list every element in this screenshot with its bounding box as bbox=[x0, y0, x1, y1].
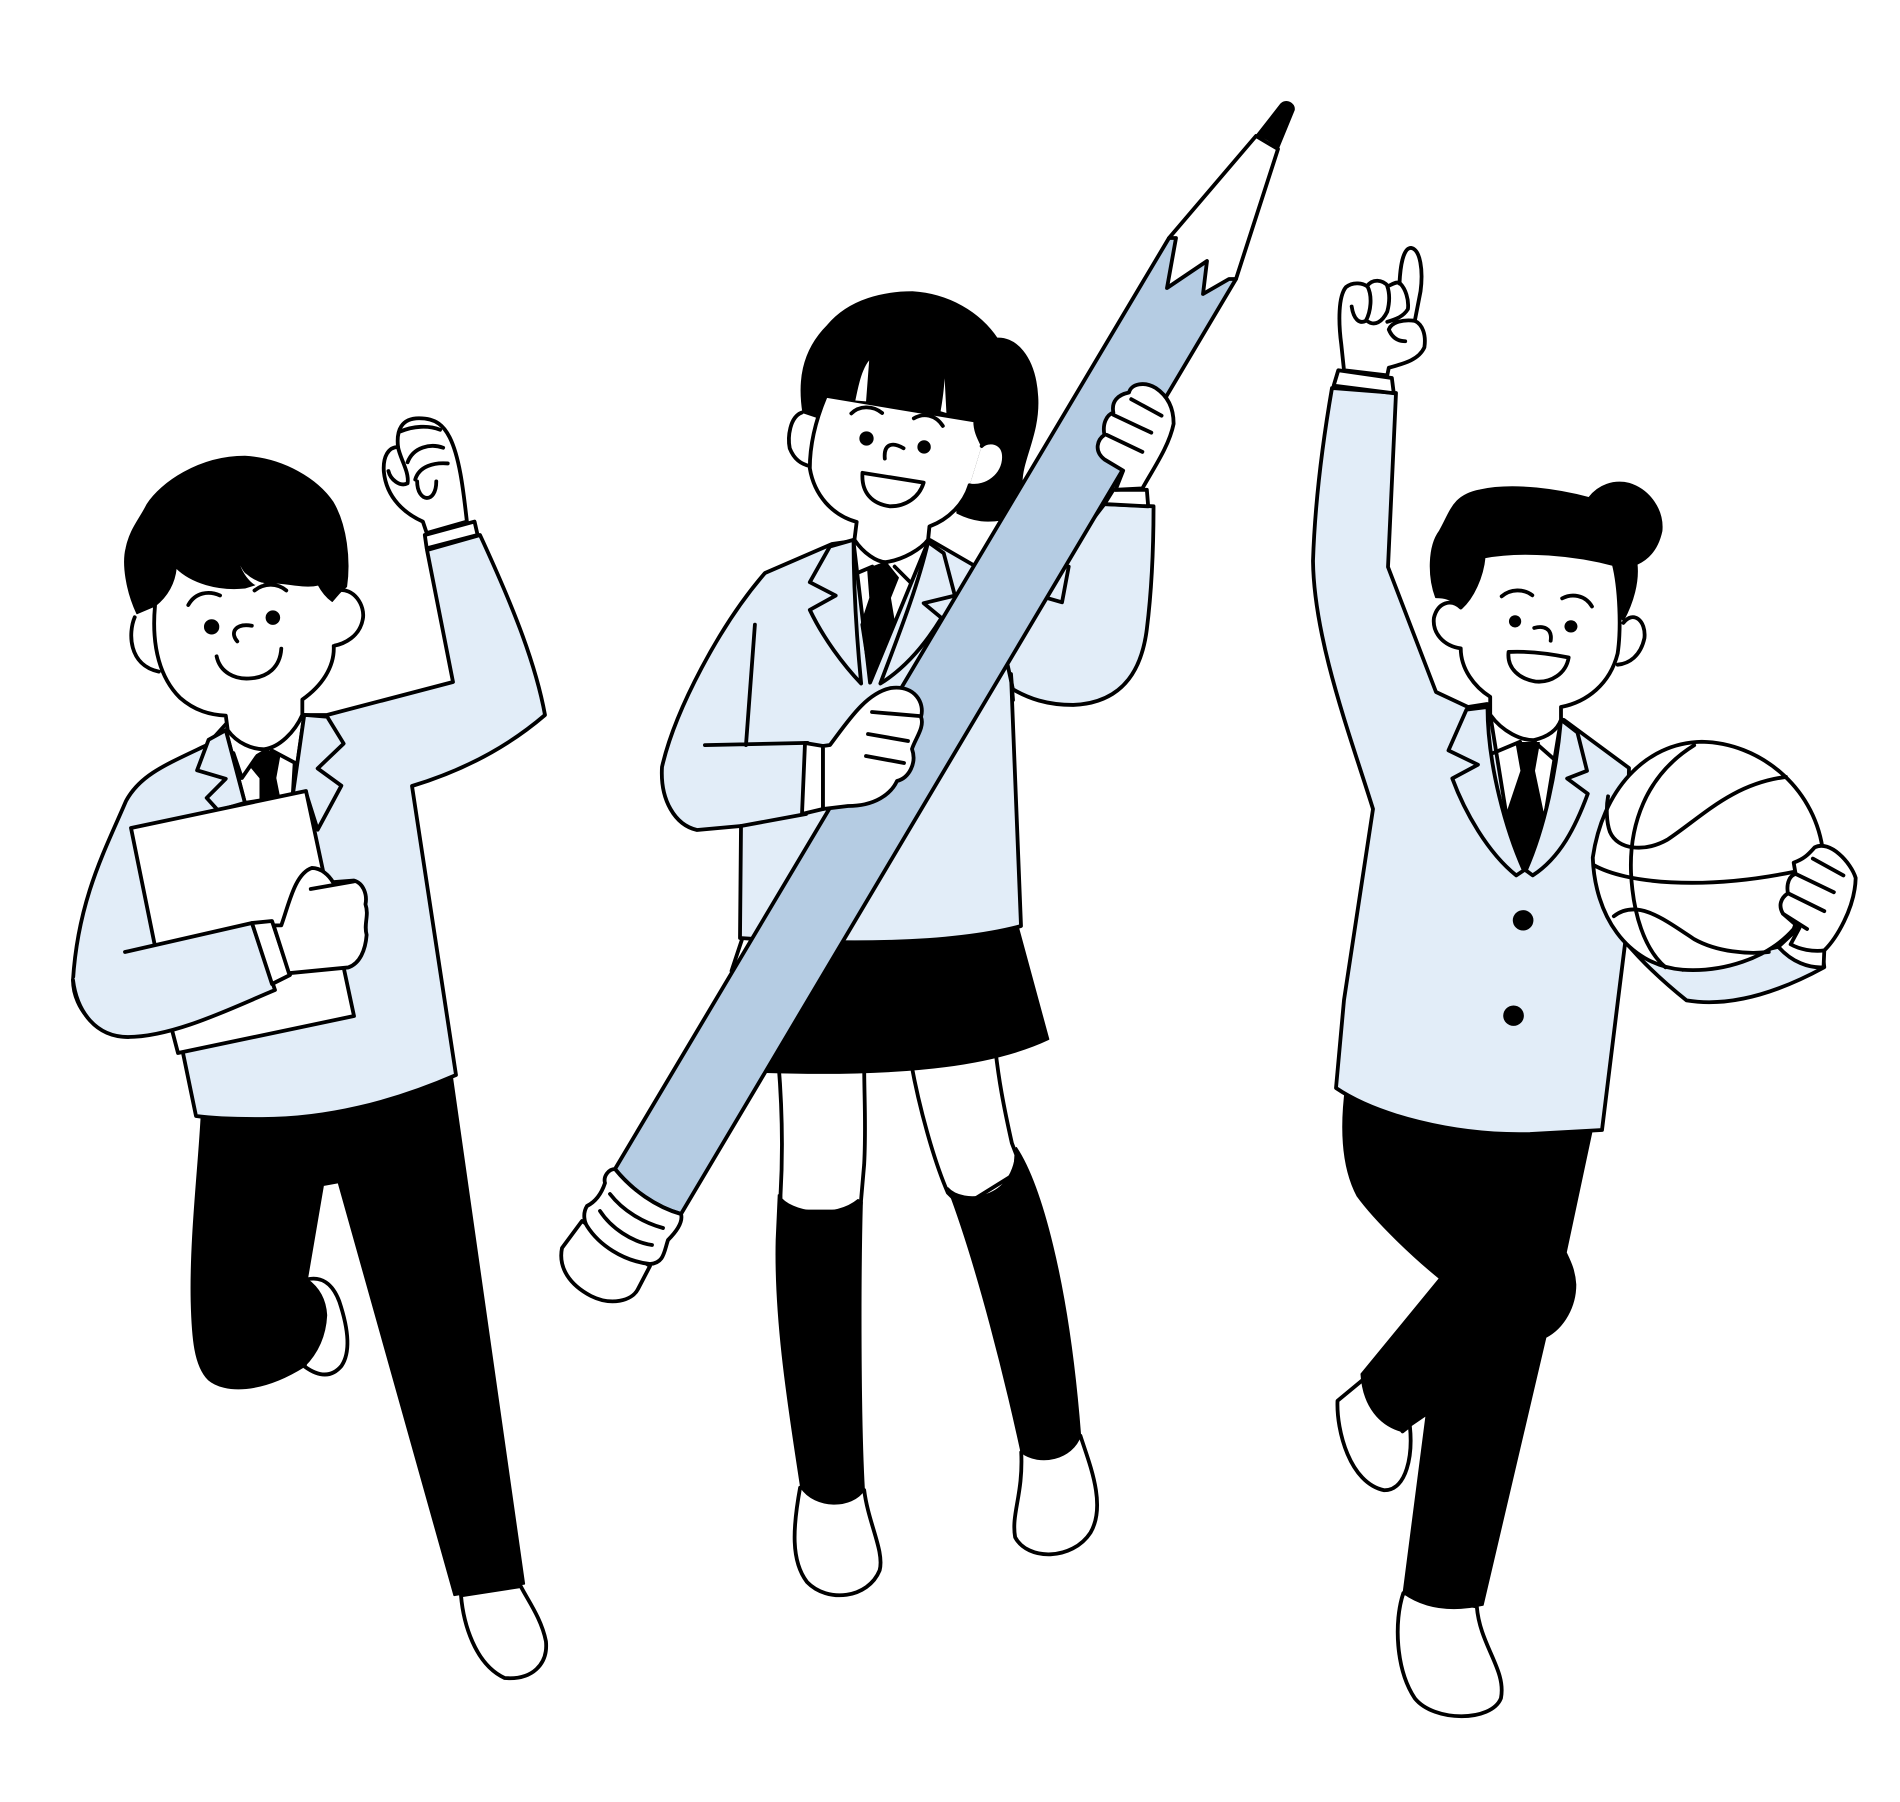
collar lines bbox=[1493, 742, 1556, 761]
eyebrows bbox=[851, 407, 943, 426]
upper fingers bbox=[1107, 399, 1162, 452]
hair fringe bbox=[801, 292, 1011, 446]
girl jacket bbox=[662, 540, 1021, 942]
girl lower body bbox=[732, 924, 1097, 1595]
left boy trousers and shoes bbox=[191, 1074, 546, 1678]
girl lower cuff bbox=[802, 743, 823, 814]
eyes bbox=[204, 610, 280, 634]
lower sleeve bbox=[1625, 942, 1824, 1002]
right lapel bbox=[880, 542, 955, 684]
right ear bbox=[1618, 617, 1645, 665]
fist line bbox=[311, 881, 354, 889]
holding fist bbox=[274, 868, 367, 973]
eyes bbox=[1509, 615, 1577, 633]
pencil wood tip bbox=[1169, 136, 1278, 279]
tie bbox=[861, 562, 898, 683]
left boy head and collar bbox=[125, 457, 363, 830]
left sock bbox=[776, 1195, 864, 1504]
tie bbox=[1507, 743, 1545, 870]
smile bbox=[217, 649, 281, 679]
girl lower fingers bbox=[866, 712, 919, 763]
right sock bbox=[948, 1148, 1080, 1460]
hair bbox=[125, 457, 348, 613]
tie bbox=[251, 749, 279, 800]
right student upper details bbox=[1334, 248, 1856, 1026]
left boy forearm bbox=[73, 923, 275, 1037]
hair highlight bbox=[240, 566, 264, 585]
torso edge and arm underside bbox=[741, 674, 1013, 826]
collar lines bbox=[857, 567, 910, 582]
skirt back line bbox=[732, 940, 742, 971]
face bbox=[154, 552, 337, 749]
pencil eraser bbox=[561, 1221, 650, 1301]
face bbox=[810, 397, 982, 562]
pencil body bbox=[615, 238, 1236, 1214]
pencil lead bbox=[1256, 102, 1294, 149]
left shoe bbox=[795, 1488, 881, 1595]
jacket buttons bbox=[1503, 910, 1533, 1026]
ball hand cuff bbox=[1778, 929, 1824, 967]
left lapel bbox=[197, 730, 245, 811]
raised cuff bbox=[1334, 370, 1394, 393]
girl right sleeve bbox=[1002, 504, 1154, 705]
left ear bbox=[789, 413, 810, 466]
figure: middle girl with giant pencil bbox=[561, 102, 1294, 1595]
fringe slits bbox=[855, 360, 946, 413]
left leg bbox=[778, 1063, 865, 1212]
eyes bbox=[859, 431, 931, 454]
basketball bbox=[1593, 742, 1822, 970]
left boy book bbox=[131, 791, 354, 1053]
giant pencil bbox=[561, 102, 1294, 1301]
shirt bbox=[1490, 715, 1561, 870]
left lapel bbox=[1448, 707, 1524, 875]
hair and bun bbox=[1431, 482, 1662, 620]
raised fist bbox=[384, 418, 467, 533]
upper cuff bbox=[1104, 490, 1148, 506]
skirt bbox=[766, 924, 1049, 1073]
left arm seam bbox=[705, 625, 808, 745]
left lapel bbox=[810, 540, 861, 684]
right lapel bbox=[1526, 720, 1588, 875]
left boy jacket bbox=[73, 535, 545, 1119]
raised cuff bbox=[425, 522, 478, 548]
ball hand fingers bbox=[1783, 859, 1843, 929]
right lapel bbox=[293, 715, 344, 830]
shirt bbox=[226, 715, 304, 803]
open mouth bbox=[862, 473, 924, 506]
nose bbox=[885, 445, 904, 459]
face bbox=[1434, 553, 1620, 740]
right ear bbox=[333, 590, 363, 646]
raised hand bbox=[1339, 248, 1425, 375]
eyebrows bbox=[1502, 590, 1592, 607]
right ear bbox=[970, 442, 1004, 486]
right student jacket bbox=[1313, 388, 1629, 1134]
pencil ferrule bbox=[584, 1169, 681, 1264]
left ear bbox=[131, 617, 159, 672]
figure: left boy with book bbox=[73, 418, 546, 1678]
right shoe bbox=[1014, 1436, 1097, 1554]
nose bbox=[234, 625, 252, 641]
ball hand bbox=[1781, 846, 1856, 951]
left boy cuff bbox=[252, 921, 290, 984]
nose bbox=[1534, 627, 1551, 641]
sleeve back detail bbox=[1046, 567, 1069, 602]
left boy hands bbox=[274, 418, 478, 973]
girl upper details bbox=[705, 292, 1069, 745]
right leg bbox=[911, 1051, 1016, 1207]
upper hand bbox=[1098, 384, 1174, 490]
girl ponytail bbox=[957, 338, 1038, 521]
ferrule ridges bbox=[600, 1194, 663, 1245]
shirt bbox=[854, 542, 928, 683]
fist fingers bbox=[388, 427, 448, 498]
girl upper hand group bbox=[1098, 384, 1174, 506]
open mouth bbox=[1508, 652, 1569, 682]
right student trousers and shoes bbox=[1337, 1086, 1593, 1716]
girl lower hand bbox=[823, 688, 922, 809]
figure: right student with basketball bbox=[1313, 248, 1856, 1716]
raised hand fingers bbox=[1352, 284, 1415, 341]
eyebrows bbox=[188, 585, 286, 605]
collar lines bbox=[233, 750, 295, 795]
